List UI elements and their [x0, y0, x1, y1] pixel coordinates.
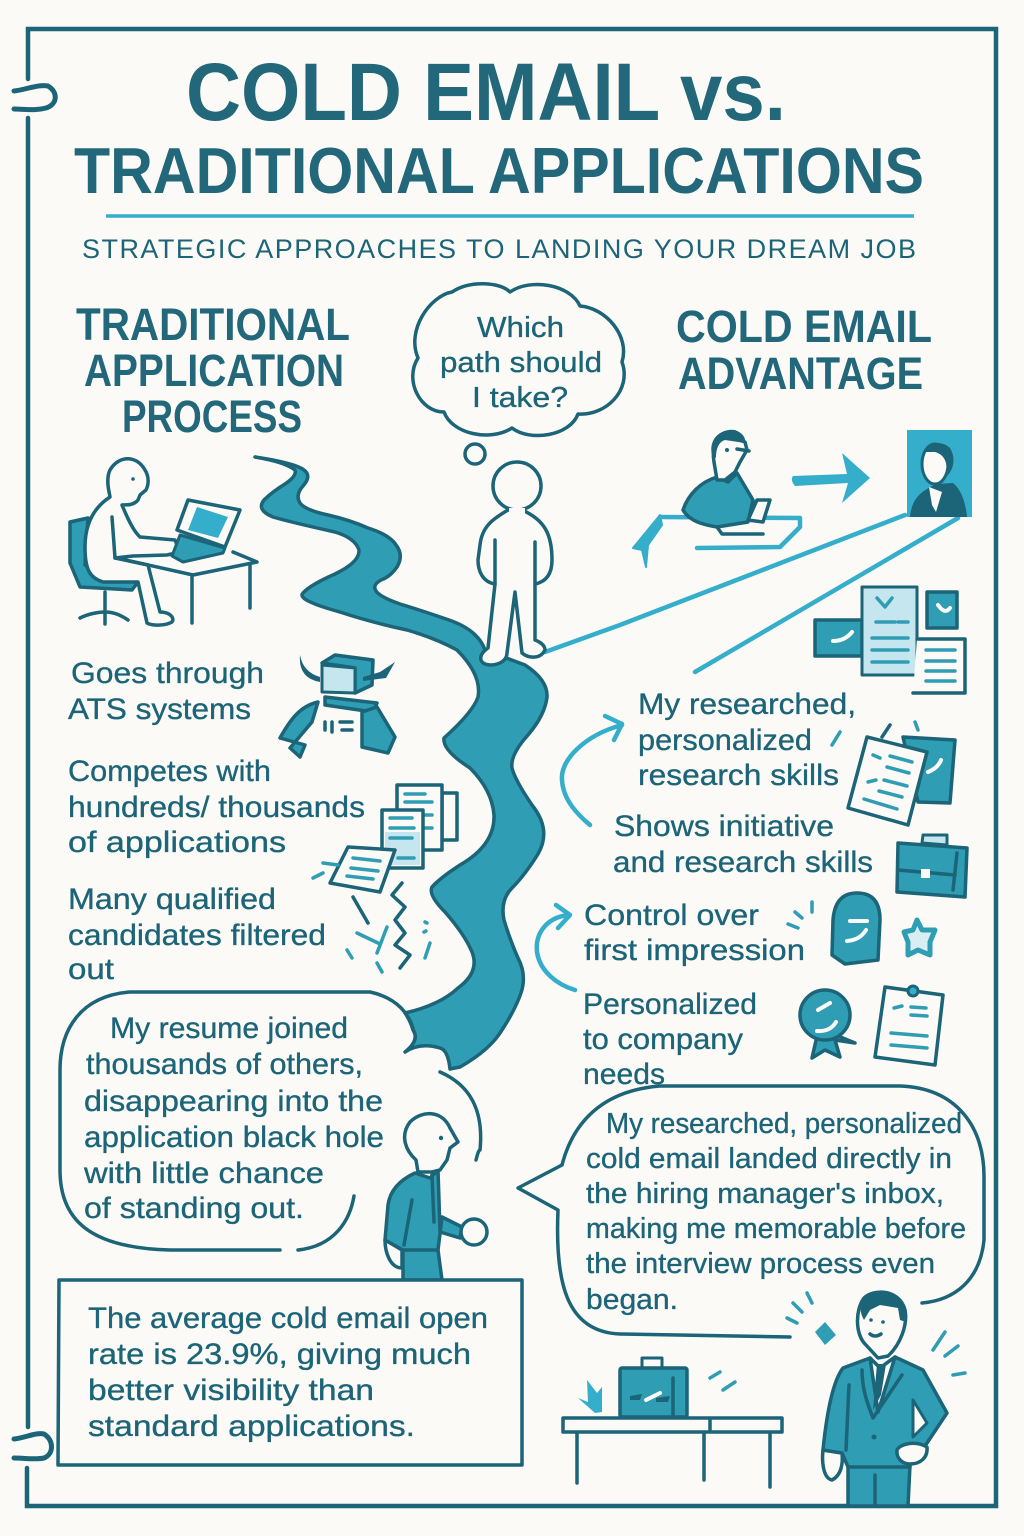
left text: filtered: out: [68, 953, 115, 986]
right text: researched: [638, 688, 856, 792]
right text: researched: personalized: [638, 724, 812, 757]
title: TRADITIONAL APPLICATIONS: [74, 134, 924, 207]
heading: traditional application process: TRADITIONAL: [76, 299, 350, 350]
speech bubble: right: the hiring manager's inbox,: [586, 1178, 944, 1210]
right text: personalized: needs: [583, 1058, 665, 1091]
hiring manager portrait: [907, 430, 972, 517]
heading: cold email advantage: COLD EMAIL: [676, 301, 932, 352]
speech bubble: left: of standing out.: [84, 1192, 304, 1225]
person at desk with laptop: [70, 459, 257, 625]
subtitle: STRATEGIC APPROACHES TO LANDING YOUR DREAM JOB: [82, 234, 916, 264]
speech bubble: left: [60, 992, 481, 1250]
icon: ribbon and checklist: [800, 986, 943, 1065]
stat box: rate is 23.9%, giving much: [88, 1338, 471, 1371]
right text: personalized: to company: [583, 1023, 743, 1056]
thought bubble: [413, 284, 624, 464]
left text: ATS: [68, 657, 264, 726]
right text: initiative: and research skills: [613, 846, 873, 879]
left text: competes: [68, 755, 365, 859]
left text: filtered: [68, 883, 326, 986]
left text: competes: Competes with: [68, 755, 271, 788]
heading: traditional application process: [76, 299, 350, 442]
documents collage: [815, 587, 965, 693]
curved arrow: researched: [562, 716, 622, 825]
left text: filtered: Many qualified: [68, 883, 276, 916]
speech bubble: right: making me memorable before: [586, 1213, 966, 1245]
right text: researched: My researched,: [638, 688, 856, 721]
icon: briefcase: [897, 835, 967, 897]
right text: control: first impression: [584, 934, 805, 967]
title: [74, 47, 924, 207]
right text: control: Control over: [584, 899, 759, 932]
heading: traditional application process: APPLICATION: [84, 345, 344, 396]
right text: personalized: [583, 988, 757, 1091]
heading: traditional application process: PROCESS: [122, 391, 302, 442]
arrow to hiring manager: [792, 453, 870, 503]
right text: researched: research skills: [638, 759, 839, 792]
title: COLD EMAIL vs.: [186, 47, 786, 138]
stat box: standard applications.: [88, 1410, 415, 1443]
speech bubble: right: the interview process even: [586, 1248, 935, 1280]
speech bubble: right: began.: [586, 1284, 678, 1316]
curved arrow: control: [537, 905, 575, 990]
speech bubble: left: My resume joined: [110, 1012, 348, 1045]
standing figure at crossroads: [478, 462, 552, 665]
stat box: better visibility than: [88, 1374, 374, 1407]
desk with briefcase: [563, 1358, 782, 1487]
icon: falling fragments: [313, 863, 430, 972]
right text: personalized: Personalized: [583, 988, 757, 1021]
speech bubble: left: thousands of others,: [86, 1048, 363, 1081]
left text: competes: of applications: [68, 826, 286, 859]
thought bubble: I take?: [472, 382, 568, 414]
speech bubble: left: application black hole: [84, 1121, 384, 1154]
icon: badge and star: [788, 893, 935, 964]
icon: stack of papers: [330, 785, 457, 892]
thought bubble: path should: [440, 347, 602, 379]
left text: ATS: Goes through: [71, 657, 264, 690]
confident businessman: [787, 1292, 965, 1506]
title underline: [106, 214, 914, 218]
stat box: [58, 1280, 522, 1465]
speech bubble: left: disappearing into the: [84, 1085, 383, 1118]
heading: cold email advantage: ADVANTAGE: [678, 348, 923, 399]
path lines to cold email: [545, 515, 958, 672]
speech bubble: left: with little chance: [83, 1157, 324, 1190]
stat box: The average cold email open: [88, 1302, 488, 1335]
thought bubble: Which: [477, 312, 564, 344]
heading: cold email advantage: [676, 301, 932, 399]
icon: robot: [280, 655, 395, 757]
right text: control: [584, 899, 805, 967]
icon: clipboard notes: [832, 722, 955, 825]
right text: initiative: [613, 810, 873, 879]
left text: filtered: candidates filtered: [68, 919, 326, 952]
river path: [255, 457, 547, 1069]
speech bubble: right: My researched, personalized: [606, 1108, 962, 1140]
speech bubble: right: [518, 1086, 984, 1337]
left text: competes: hundreds/ thousands: [68, 791, 365, 824]
left text: ATS: ATS systems: [68, 693, 251, 726]
speech bubble: right: cold email landed directly in: [586, 1143, 952, 1175]
right text: initiative: Shows initiative: [614, 810, 834, 843]
person writing email: [633, 430, 800, 567]
worried person: [385, 1114, 487, 1280]
